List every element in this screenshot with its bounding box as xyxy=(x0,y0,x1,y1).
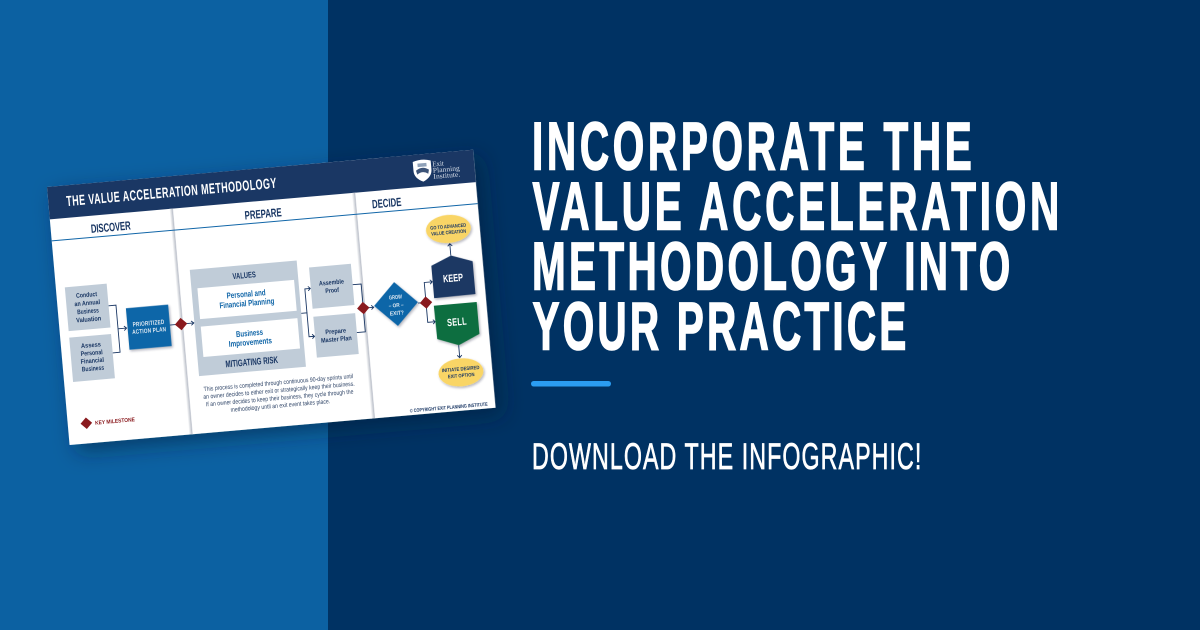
process description text: If an owner decides to keep their business, they cycle through the xyxy=(206,388,354,408)
box: conduct valuation: an Annual xyxy=(74,299,101,308)
card title band xyxy=(47,150,476,219)
box: prepare master plan xyxy=(313,313,359,358)
box: business improvements: Improvements xyxy=(228,335,273,349)
heading: discover: DISCOVER xyxy=(90,220,132,236)
box: sell xyxy=(434,302,480,347)
arrow: action plan to values xyxy=(170,321,194,327)
logo: Exit Planning Institute: Planning xyxy=(432,164,461,175)
box: sell: SELL xyxy=(447,315,467,329)
oval: go to advanced value creation xyxy=(425,213,472,245)
box: prioritized action plan: ACTION PLAN xyxy=(132,327,166,336)
box: assess personal financial business: Financial xyxy=(80,357,104,366)
box: assess personal financial business: Business xyxy=(82,365,105,374)
box: prioritized action plan xyxy=(126,305,172,350)
box: keep: KEEP xyxy=(443,271,463,285)
logo: Exit Planning Institute: Institute. xyxy=(433,171,461,181)
oval: initiate desired exit option: EXIT OPTION xyxy=(448,372,475,380)
box: assemble proof: Assemble xyxy=(319,278,344,288)
diamond: grow or exit: EXIT? xyxy=(390,310,405,318)
process description text xyxy=(202,373,357,416)
legend: key milestone xyxy=(80,413,136,430)
process description text: an owner decides to either exit or strategically keep their business. xyxy=(203,381,355,401)
accent bar xyxy=(531,381,611,386)
box: values and mitigating risk: MITIGATING RISK xyxy=(225,355,279,370)
box: conduct valuation: Valuation xyxy=(76,315,102,325)
milestone diamond 1 xyxy=(174,317,188,331)
column divider: prepare / decide xyxy=(352,193,375,419)
milestone diamond 3 xyxy=(419,296,433,309)
box: prepare master plan: Master Plan xyxy=(321,335,352,345)
box: business improvements: Business xyxy=(236,327,264,339)
oval: go to advanced value creation: GO TO ADVANCED xyxy=(430,223,467,232)
main headline: METHODOLOGY INTO xyxy=(532,229,1010,304)
box: conduct valuation: Conduct xyxy=(76,291,98,300)
box: personal and financial planning: Personal and xyxy=(226,287,266,301)
main headline: VALUE ACCELERATION xyxy=(532,169,1059,244)
box: assess personal financial business: Assess xyxy=(81,341,102,350)
diamond: grow or exit: – OR – xyxy=(388,302,404,310)
logo: Exit Planning Institute: Exit xyxy=(432,160,444,169)
box: prioritized action plan: PRIORITIZED xyxy=(132,319,165,329)
box: personal and financial planning: Financial Planning xyxy=(219,296,275,310)
background: right navy panel xyxy=(328,0,1200,630)
copyright: © COPYRIGHT EXIT PLANNING INSTITUTE xyxy=(410,401,488,415)
box: business improvements xyxy=(201,318,300,357)
box: values and mitigating risk: VALUES xyxy=(232,269,256,281)
card title band: THE VALUE ACCELERATION METHODOLOGY xyxy=(66,175,277,210)
oval: go to advanced value creation: VALUE CREATION xyxy=(431,229,467,238)
diamond: grow or exit xyxy=(372,280,420,328)
box: prepare master plan: Prepare xyxy=(325,327,347,336)
legend: key milestone: KEY MILESTONE xyxy=(95,417,135,427)
oval: initiate desired exit option xyxy=(437,356,485,388)
arrow: discover boxes into action plan xyxy=(109,304,129,353)
box: conduct valuation: Business xyxy=(77,307,99,316)
call to action: DOWNLOAD THE INFOGRAPHIC! xyxy=(532,436,921,478)
arrows: values to assemble and prepare xyxy=(299,286,315,339)
card paper xyxy=(47,150,496,445)
arrows: prepare column into grow or exit xyxy=(353,283,376,333)
arrows: decision to keep and sell xyxy=(416,280,436,325)
process description text: This process is completed through continuous 90-day sprints until xyxy=(203,373,353,393)
process description text: methodology until an exit event takes place. xyxy=(230,398,331,414)
tilted methodology card xyxy=(47,150,496,445)
box: keep xyxy=(431,254,476,298)
main headline: YOUR PRACTICE xyxy=(532,289,906,364)
box: values and mitigating risk xyxy=(190,261,306,376)
box: assess personal financial business xyxy=(69,334,115,382)
arrow: sell to exit option xyxy=(456,345,462,358)
column divider: discover / prepare xyxy=(169,209,193,435)
milestone diamond 2 xyxy=(357,301,370,315)
box: assess personal financial business: Personal xyxy=(80,349,103,358)
heading: prepare: PREPARE xyxy=(244,207,282,223)
oval: initiate desired exit option: INITIATE DESIRED xyxy=(442,365,480,374)
arrow: keep to advanced value creation xyxy=(447,243,453,256)
box: assemble proof: Proof xyxy=(325,287,340,295)
box: assemble proof xyxy=(309,264,354,309)
background: left blue panel xyxy=(0,0,328,630)
heading: decide: DECIDE xyxy=(372,196,402,212)
diamond: grow or exit: GROW xyxy=(389,294,403,302)
main headline xyxy=(532,109,1059,364)
heading underline xyxy=(52,203,478,241)
main headline: INCORPORATE THE xyxy=(532,109,972,184)
box: personal and financial planning xyxy=(197,280,297,319)
box: conduct valuation xyxy=(65,284,110,331)
logo: Exit Planning Institute xyxy=(413,156,461,183)
